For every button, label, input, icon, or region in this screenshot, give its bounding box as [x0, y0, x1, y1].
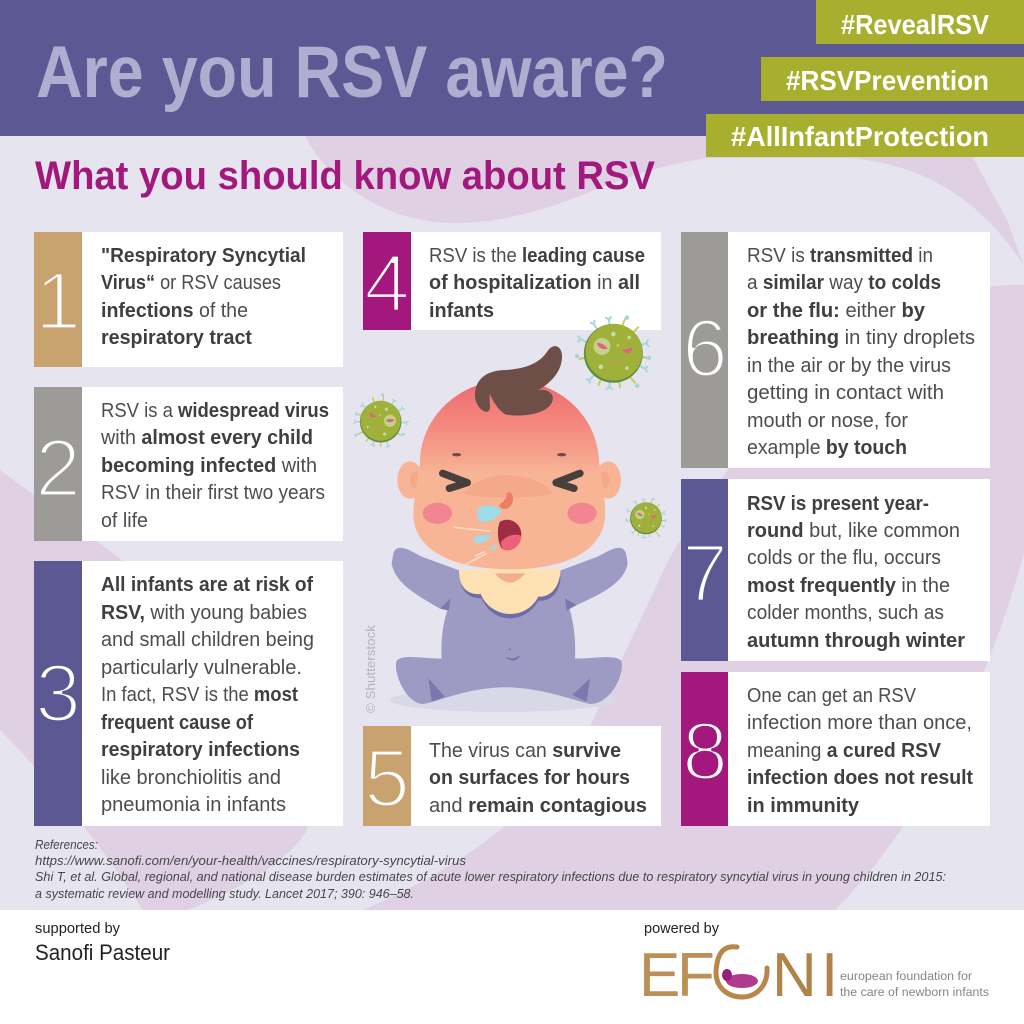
- panel 3: like bronchiolitis and: [101, 767, 281, 789]
- panel 3: particularly vulnerable.: [101, 657, 302, 679]
- body and limbs: [392, 548, 628, 704]
- panel 7: RSV is present year-: [747, 493, 929, 515]
- panel 7: 7: [682, 528, 728, 619]
- supporter: Sanofi Pasteur: [35, 940, 170, 965]
- head: [413, 380, 605, 569]
- panel 1: respiratory tract: [101, 327, 252, 349]
- panel 3: In fact, RSV is the most: [101, 684, 298, 706]
- panel 6: in the air or by the virus: [747, 355, 951, 377]
- panel 7: [681, 479, 990, 661]
- powered by: powered by: [644, 921, 720, 937]
- EFCNI logo: european foundation for: [840, 969, 972, 983]
- panel 2: 2: [35, 423, 81, 514]
- panel 6: getting in contact with: [747, 382, 944, 404]
- panel 6: [681, 232, 990, 468]
- panel 5: and remain contagious: [429, 795, 647, 817]
- panel 6: mouth or nose, for: [747, 410, 908, 432]
- hashtag badges: #AllInfantProtection: [731, 121, 989, 152]
- EFCNI logo: the care of newborn infants: [840, 985, 989, 999]
- panel 2: becoming infected with: [101, 455, 317, 477]
- panel 8: infection does not result: [747, 767, 973, 789]
- panel 2: RSV is a widespread virus: [101, 400, 329, 422]
- face: [423, 453, 597, 567]
- panel 4: [363, 232, 661, 330]
- bib: [459, 568, 561, 618]
- panel 3: All infants are at risk of: [101, 574, 313, 596]
- panel 2: of life: [101, 510, 148, 532]
- panel 1: 1: [35, 256, 81, 347]
- panel 3: 3: [35, 648, 81, 739]
- panel 7: colder months, such as: [747, 602, 944, 624]
- virus large: [575, 315, 651, 389]
- virus right: [625, 498, 667, 538]
- subtitle: What you should know about RSV: [35, 154, 655, 198]
- panel 5: on surfaces for hours: [429, 767, 630, 789]
- header band: [0, 0, 1024, 136]
- virus left: [346, 386, 417, 456]
- panel 4: RSV is the leading cause: [429, 245, 645, 267]
- panel 3: and small children being: [101, 629, 314, 651]
- panel 1: Virus“ or RSV causes: [101, 272, 281, 294]
- panel 6: RSV is transmitted in: [747, 245, 933, 267]
- references: a systematic review and modelling study. Lancet 2017; 390: 946–58.: [35, 886, 414, 901]
- panel 2: RSV in their first two years: [101, 482, 325, 504]
- panel 8: 8: [682, 706, 728, 797]
- panel 6: breathing in tiny droplets: [747, 327, 975, 349]
- panel 3: [34, 561, 343, 826]
- EFCNI logo: I: [821, 941, 838, 1010]
- panel 8: [681, 672, 990, 826]
- panel 7: colds or the flu, occurs: [747, 547, 941, 569]
- panel 1: [34, 232, 343, 367]
- panel 5: 5: [364, 733, 410, 824]
- panel 1: infections of the: [101, 300, 248, 322]
- panel 8: One can get an RSV: [747, 685, 917, 707]
- panel 6: 6: [682, 303, 728, 394]
- hair: [475, 346, 562, 416]
- EFCNI logo: F: [677, 941, 715, 1010]
- panel 3: pneumonia in infants: [101, 794, 286, 816]
- panel 7: autumn through winter: [747, 630, 965, 652]
- panel 7: most frequently in the: [747, 575, 950, 597]
- hashtag badges: #RevealRSV: [841, 9, 990, 40]
- photo credit: © Shutterstock: [364, 624, 378, 713]
- ears: [397, 461, 621, 499]
- hashtag badges: [706, 0, 1024, 157]
- shadow under baby: [390, 688, 617, 712]
- panel 5: [363, 726, 661, 826]
- illustration: sick baby with viruses: [346, 315, 667, 712]
- panel 6: example by touch: [747, 437, 907, 459]
- references: Shi T, et al. Global, regional, and national disease burden estimates of acute lower respiratory infections due to respiratory syncytial virus in young children in 2015:: [35, 869, 946, 884]
- panel 3: frequent cause of: [101, 712, 253, 734]
- supporter: supported by: [35, 921, 121, 937]
- panel 2: [34, 387, 343, 541]
- references: References:: [35, 837, 98, 852]
- panel 3: RSV, with young babies: [101, 602, 307, 624]
- EFCNI logo: [639, 941, 989, 1010]
- references: https://www.sanofi.com/en/your-health/vaccines/respiratory-syncytial-virus: [35, 853, 467, 868]
- EFCNI logo: E: [639, 941, 680, 1010]
- panel 5: The virus can survive: [429, 740, 621, 762]
- panel 8: infection more than once,: [747, 712, 972, 734]
- panel 4: of hospitalization in all: [429, 272, 640, 294]
- title: Are you RSV aware?: [36, 32, 668, 113]
- panel 6: or the flu: either by: [747, 300, 926, 322]
- panel 6: a similar way to colds: [747, 272, 941, 294]
- references: [35, 837, 946, 901]
- hashtag badges: #RSVPrevention: [786, 65, 989, 96]
- panel 8: meaning a cured RSV: [747, 740, 942, 762]
- EFCNI logo: N: [772, 941, 817, 1010]
- panel 4: 4: [364, 238, 410, 329]
- panel 1: "Respiratory Syncytial: [101, 245, 306, 267]
- panel 2: with almost every child: [100, 427, 313, 449]
- supporter: [35, 921, 170, 965]
- panel 7: round but, like common: [747, 520, 960, 542]
- panel 4: infants: [429, 300, 494, 322]
- footer band: [0, 910, 1024, 1024]
- panel 3: respiratory infections: [101, 739, 300, 761]
- panel 8: in immunity: [747, 795, 860, 817]
